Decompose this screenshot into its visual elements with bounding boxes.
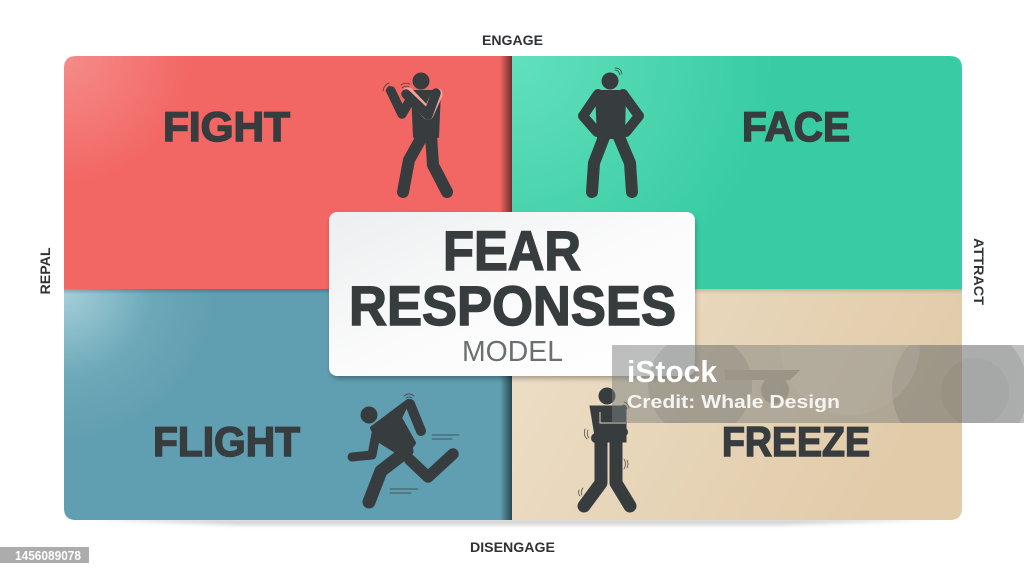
icon: freeze figure xyxy=(579,388,630,506)
panel shadow below the matrix xyxy=(90,519,940,525)
axis label: engage: ENGAGE xyxy=(482,32,543,48)
watermark brand: iStock xyxy=(627,354,718,389)
axis label: repal: REPAL xyxy=(37,247,53,294)
icon: fight figure xyxy=(383,72,447,192)
heading: fight: FIGHT xyxy=(163,103,290,150)
axis label: disengage: DISENGAGE xyxy=(470,539,555,555)
image id badge: 1456089078 xyxy=(15,549,81,563)
panel: freeze xyxy=(512,289,962,520)
title: RESPONSES xyxy=(349,274,676,337)
heading: flight: FLIGHT xyxy=(153,418,300,465)
panel: flight xyxy=(64,289,512,520)
axis label: attract: ATTRACT xyxy=(971,238,987,305)
icon: face figure xyxy=(583,68,639,192)
heading: face: FACE xyxy=(742,103,850,150)
watermark xyxy=(612,345,1024,423)
watermark credit: Credit: Whale Design xyxy=(627,392,840,412)
panel: face xyxy=(512,56,962,289)
title: FEAR xyxy=(443,219,581,282)
subtitle: MODEL xyxy=(462,336,563,368)
center card xyxy=(329,212,695,378)
heading: freeze: FREEZE xyxy=(722,418,870,465)
icon: flight figure xyxy=(352,394,459,502)
image id badge xyxy=(0,547,89,563)
panel: fight xyxy=(64,56,512,289)
title xyxy=(349,219,676,337)
